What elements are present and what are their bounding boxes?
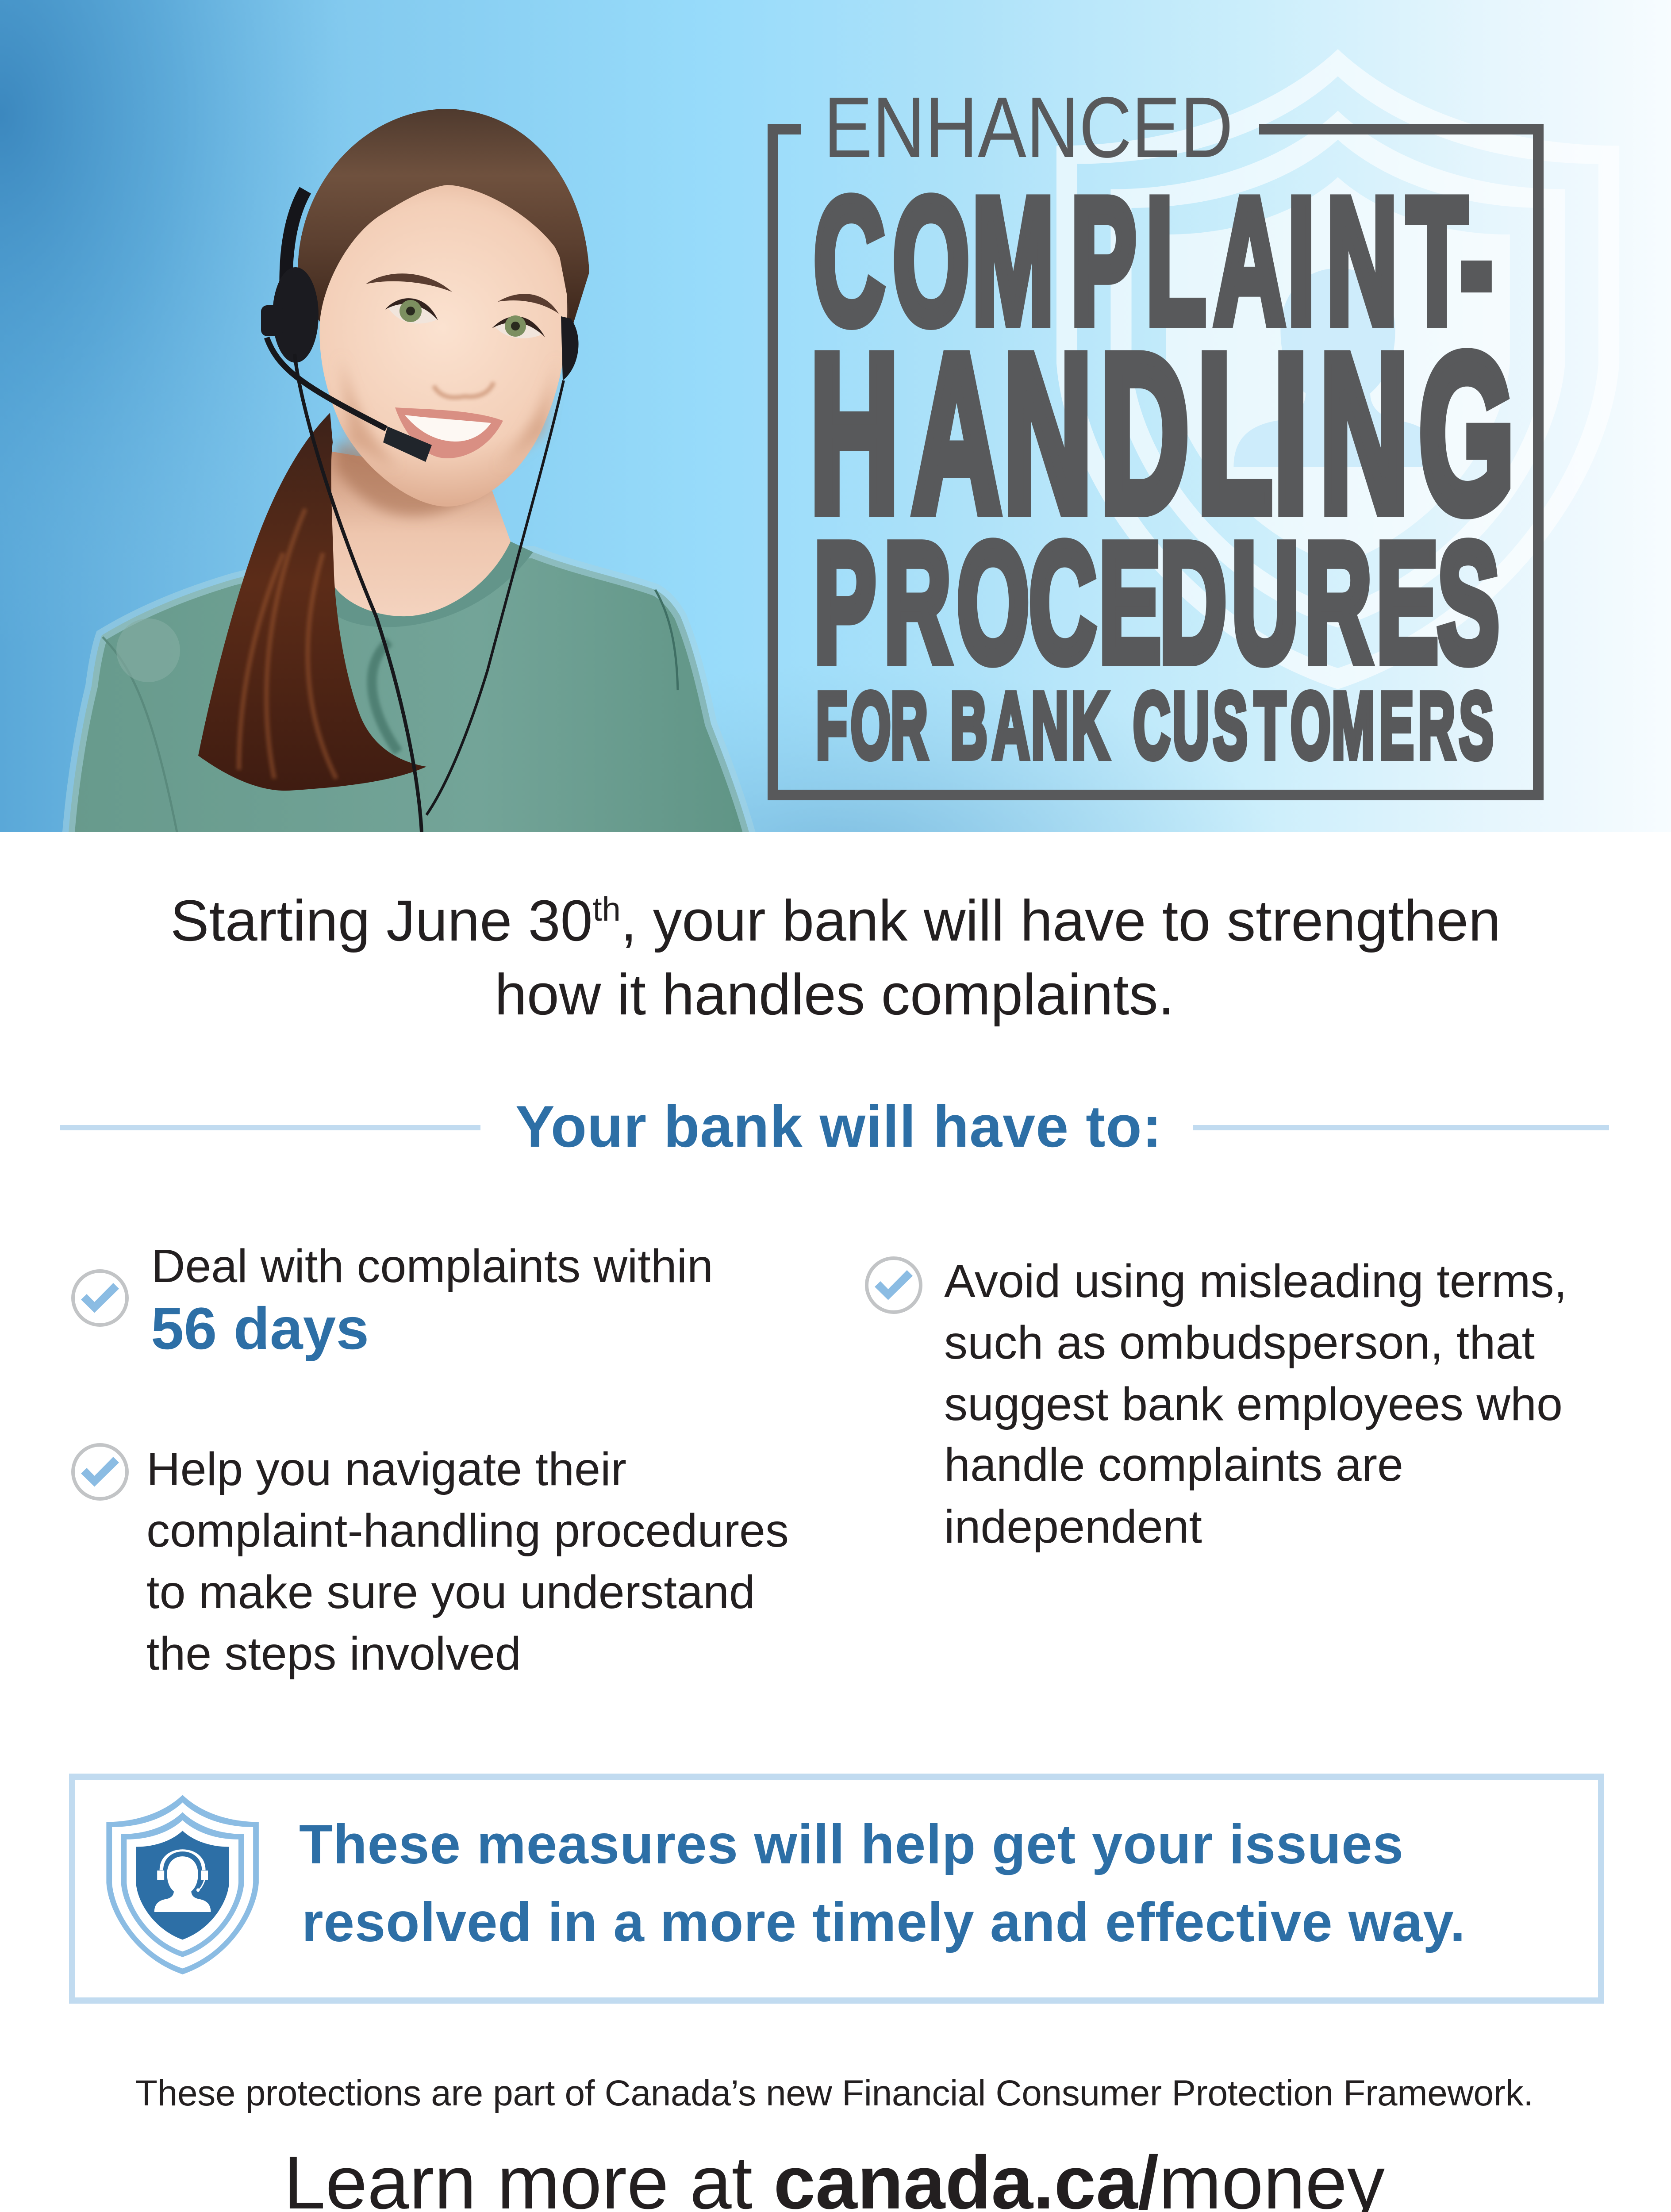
hero banner (0, 0, 1671, 854)
text: avoid misleading terms (944, 1255, 1567, 1553)
text: help you navigate: to make sure you understand (146, 1566, 755, 1618)
text: help you navigate: Help you navigate their (146, 1443, 626, 1495)
text: avoid misleading terms: independent (944, 1501, 1202, 1553)
text: avoid misleading terms: Avoid using misleading terms, (944, 1255, 1567, 1307)
section heading with rules: Your bank will have to: (515, 1094, 1162, 1160)
text: help you navigate (146, 1443, 789, 1680)
callout panel (72, 1777, 1601, 2001)
title: Complaint-Handling Procedures for Bank Customers: FOR BANK CUSTOMERS (816, 673, 1494, 778)
hero sky background (0, 0, 1671, 832)
intro text: , your bank will have to strengthen (621, 888, 1501, 953)
intro text: how it handles complaints. (495, 962, 1174, 1027)
ponytail (198, 413, 426, 791)
item: misleading terms (867, 1255, 1567, 1553)
callout text: resolved in a more timely and effective way. (302, 1892, 1465, 1953)
text: deal with complaints (151, 1240, 713, 1362)
hair (298, 109, 589, 332)
intro text: Starting June 30 (170, 888, 593, 953)
title: Enhanced: ENHANCED (824, 79, 1233, 176)
title: Complaint-Handling Procedures for Bank Customers (810, 161, 1514, 778)
icon: check mark (867, 1258, 921, 1312)
icon: shield with support agent (106, 1795, 259, 1974)
item: navigate procedures (73, 1443, 789, 1680)
text: avoid misleading terms: handle complaints are (944, 1439, 1403, 1491)
title: Complaint-Handling Procedures for Bank Customers: PROCEDURES (814, 509, 1499, 697)
watermark shield (1056, 49, 1619, 689)
intro text (170, 888, 1501, 1027)
text: help you navigate: the steps involved (146, 1628, 521, 1680)
title: Complaint-Handling Procedures for Bank Customers: COMPLAINT- (814, 161, 1493, 361)
headset (261, 190, 579, 832)
callout text (299, 1814, 1465, 1953)
title: Complaint-Handling Procedures for Bank Customers: HANDLING (810, 309, 1514, 558)
face (319, 184, 567, 507)
section heading with rules (60, 1094, 1609, 1160)
neck (327, 442, 511, 616)
text: help you navigate: complaint-handling procedures (146, 1505, 789, 1557)
back of hair (298, 109, 589, 332)
text: deal with complaints: 56 days (151, 1296, 369, 1362)
callout text: These measures will help get your issues (299, 1814, 1403, 1875)
item: 56 days (73, 1240, 713, 1362)
icon: check mark (73, 1445, 127, 1499)
framework note: These protections are part of Canada’s new Financial Consumer Protection Framework. (135, 2073, 1533, 2113)
intro text: th (593, 891, 621, 928)
text: avoid misleading terms: suggest bank employees who (944, 1378, 1563, 1430)
title frame (773, 129, 1538, 795)
sweater (62, 541, 757, 854)
text: avoid misleading terms: such as ombudsperson, that (944, 1317, 1535, 1369)
photo: call-centre agent wearing a headset (62, 109, 757, 854)
text: deal with complaints: Deal with complaints within (151, 1240, 713, 1292)
icon: check mark (73, 1271, 127, 1325)
